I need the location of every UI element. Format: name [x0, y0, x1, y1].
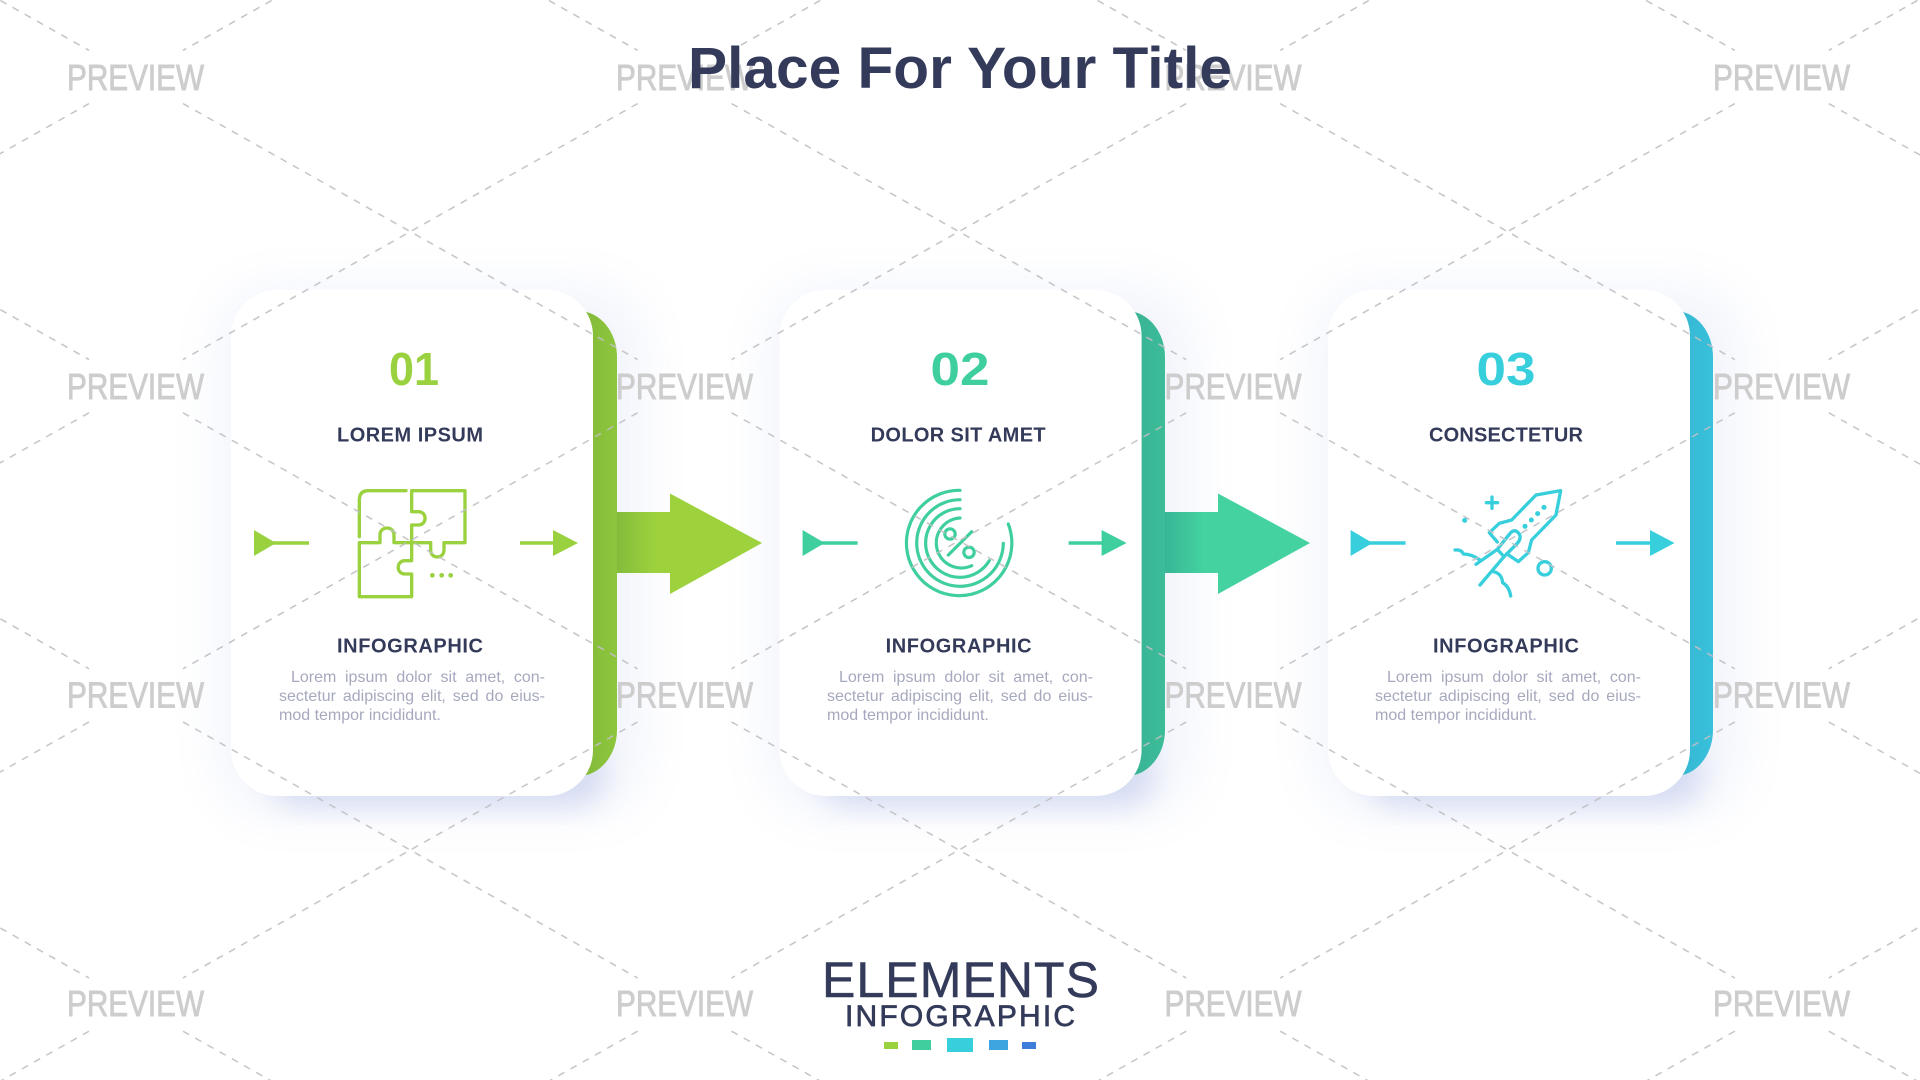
card shadows	[221, 290, 1738, 810]
logo word: elements: ELEMENTS	[822, 952, 1099, 1008]
body text: mod tempor incididunt.	[279, 707, 441, 724]
panel: step 3	[1328, 290, 1690, 796]
body text	[1375, 669, 1641, 724]
body text: mod tempor incididunt.	[1375, 707, 1537, 724]
body text: sectetur adipiscing elit, sed do eius-	[279, 688, 545, 705]
left arrow	[803, 530, 858, 556]
heading: dolor sit amet: DOLOR SIT AMET	[871, 424, 1046, 446]
body text: Lorem ipsum dolor sit amet, con-	[291, 669, 545, 686]
heading: infographic: INFOGRAPHIC	[886, 636, 1032, 658]
watermark overlay: PREVIEW	[616, 983, 753, 1024]
number 01: 01	[389, 343, 439, 395]
watermark overlay: PREVIEW	[1164, 674, 1302, 716]
body text	[827, 669, 1093, 724]
watermark overlay: PREVIEW	[616, 674, 753, 716]
icon: percent radar	[906, 490, 1012, 596]
watermark overlay: PREVIEW	[67, 674, 204, 716]
watermark overlay: PREVIEW	[616, 366, 753, 407]
step 3 side band	[1637, 311, 1713, 776]
body text: Lorem ipsum dolor sit amet, con-	[1387, 669, 1641, 686]
watermark overlay: PREVIEW	[1713, 366, 1850, 407]
watermark overlay: PREVIEW	[1713, 983, 1850, 1024]
body text: sectetur adipiscing elit, sed do eius-	[1375, 688, 1641, 705]
watermark overlay: PREVIEW	[1164, 57, 1302, 98]
panel: step 1	[231, 290, 593, 796]
watermark overlay: PREVIEW	[67, 366, 204, 407]
left arrow	[254, 530, 309, 556]
step 1 side band and arrow	[540, 311, 762, 776]
heading: infographic: INFOGRAPHIC	[1433, 636, 1579, 658]
right arrow	[520, 530, 578, 556]
colour swatches	[884, 1038, 1036, 1052]
watermark overlay: PREVIEW	[1713, 674, 1850, 716]
title: Place For Your Title	[688, 36, 1232, 101]
left arrow	[1351, 530, 1406, 556]
body text: sectetur adipiscing elit, sed do eius-	[827, 688, 1093, 705]
icon: rocket	[1455, 491, 1561, 596]
watermark overlay: PREVIEW	[67, 57, 204, 98]
right arrow	[1069, 530, 1127, 556]
heading: consectetur: CONSECTETUR	[1429, 424, 1584, 446]
watermark overlay: PREVIEW	[1713, 57, 1850, 98]
number 02: 02	[930, 343, 990, 395]
footer logo	[822, 952, 1099, 1052]
heading: infographic: INFOGRAPHIC	[337, 636, 483, 658]
watermark overlay: PREVIEW	[67, 983, 204, 1024]
body text: mod tempor incididunt.	[827, 707, 989, 724]
right arrow	[1616, 530, 1674, 556]
number 03: 03	[1476, 343, 1536, 395]
watermark overlay: PREVIEW	[1164, 366, 1302, 407]
logo word: infographic: INFOGRAPHIC	[845, 1000, 1075, 1033]
heading: lorem ipsum: LOREM IPSUM	[337, 424, 483, 446]
panel: step 2	[780, 290, 1142, 796]
icon: puzzle	[359, 491, 465, 597]
body text	[279, 669, 545, 724]
watermark overlay: PREVIEW	[616, 57, 753, 98]
body text: Lorem ipsum dolor sit amet, con-	[839, 669, 1093, 686]
step 2 side band and arrow	[1088, 311, 1310, 776]
watermark overlay: PREVIEW	[1164, 983, 1302, 1024]
